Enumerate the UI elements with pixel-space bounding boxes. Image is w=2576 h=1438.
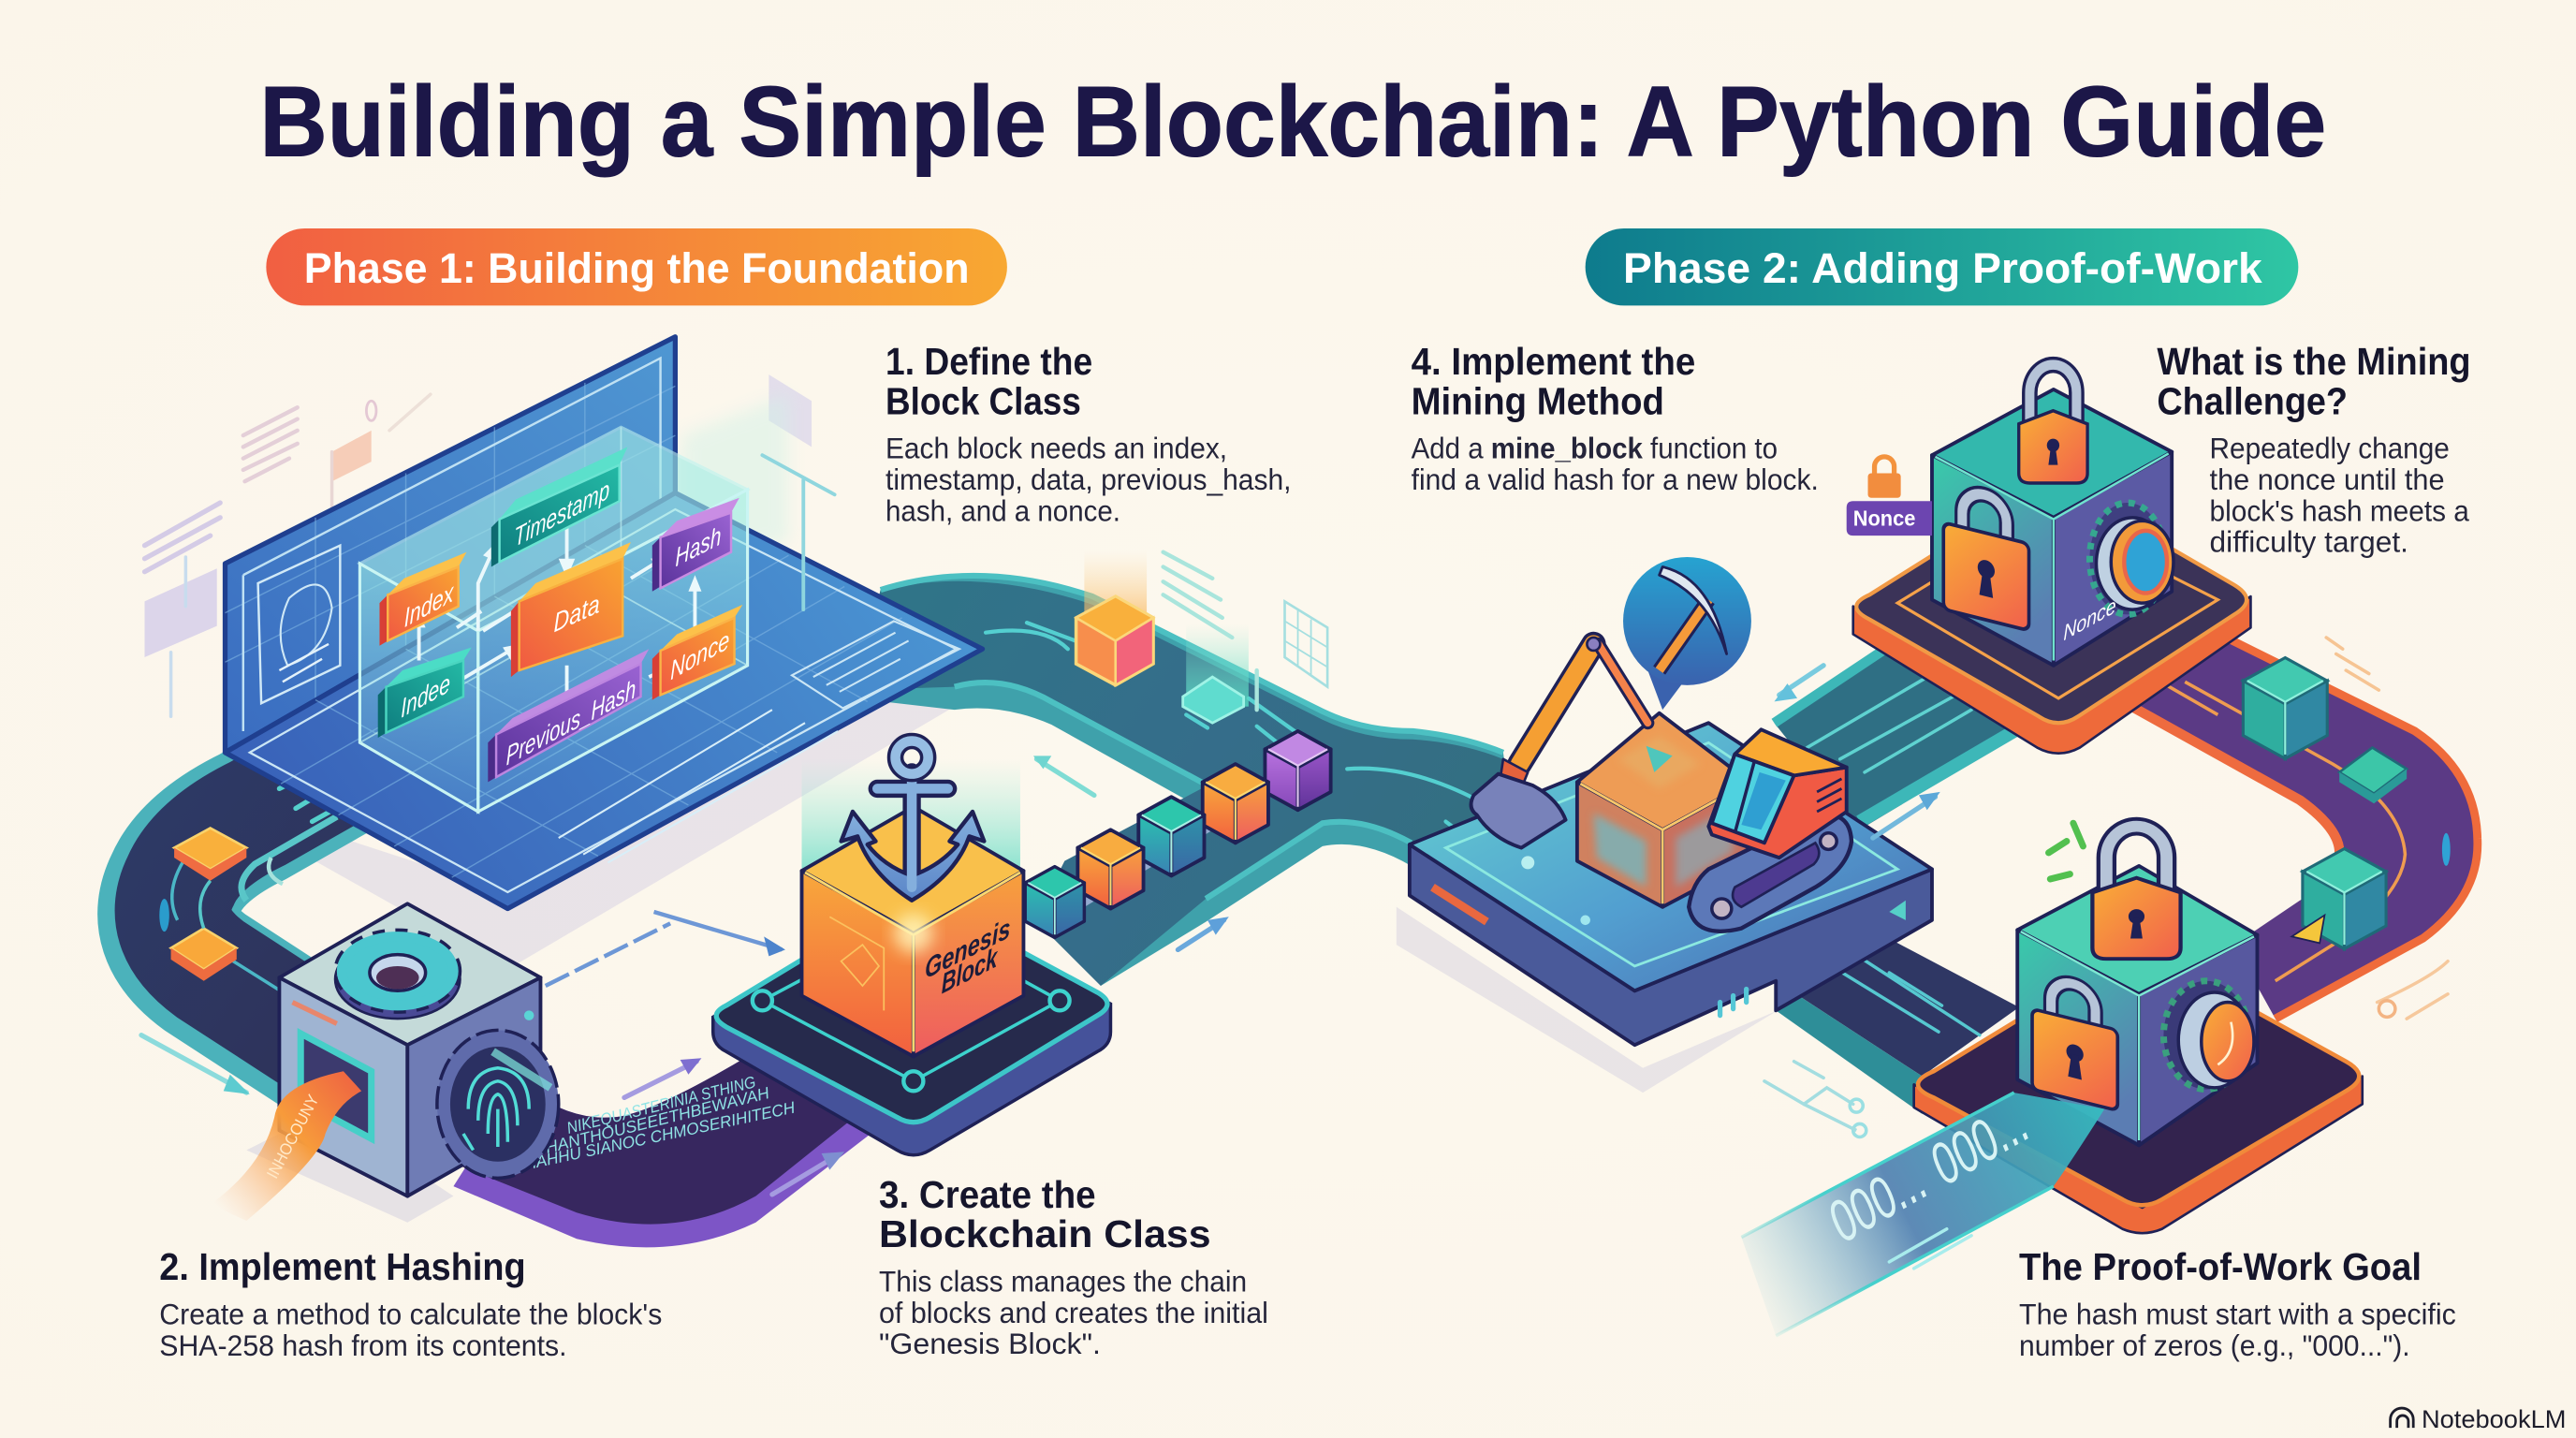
hash output ribbon with zeros: 000... [1817,1148,1938,1255]
proof-of-work goal text: number of zeros (e.g., "000..."). [2019,1328,2410,1362]
goal block [2017,827,2257,1145]
wall [225,337,675,753]
input window [300,1034,372,1138]
step 2 text: SHA-258 hash from its contents. [159,1328,567,1362]
hash output ribbon with zeros [1741,1090,2104,1336]
proof-of-work goal text [2019,1245,2456,1362]
field: Indee [378,647,472,738]
mining challenge text: block's hash meets a [2210,493,2469,527]
excavator platform [1397,723,1932,1093]
genesis label [925,911,1010,1000]
field: Index: Index [404,578,454,634]
padlock top [2019,365,2087,483]
floor [225,493,983,909]
field: Hash: Hash [675,521,722,573]
nonce text on block: Nonce [2063,594,2116,646]
road: nonce to lock (purple) [2111,636,2478,1019]
field: Nonce: Nonce [670,625,729,686]
field: Hash [652,498,739,592]
icon: success spark [2049,823,2083,879]
genesis label: Block [942,940,998,1000]
decorative floating panels around the blueprint [145,374,812,716]
step 4 text: find a valid hash for a new block. [1412,462,1819,496]
field: Nonce [652,605,742,700]
title: Building a Simple Blockchain: A Python Guide [259,66,2326,178]
input ribbon [211,1071,361,1221]
field: Indee: Indee [401,668,450,724]
hash string text on the road: HANTHOUSEEETHBEWAVAH [544,1083,771,1157]
block: purple [1265,731,1331,810]
block: orange 2 [1077,829,1144,909]
step 4 text [1412,340,1819,496]
step 2 text [159,1245,662,1362]
genesis beam [802,759,1020,890]
field: Previous_Hash [488,649,649,782]
step 1 text: Each block needs an index, [886,432,1227,465]
padlock top open [2092,827,2181,959]
step 3 text: of blocks and creates the initial [879,1296,1268,1329]
mining challenge text: Repeatedly change [2210,432,2450,465]
field: Previous_Hash: Previous_Hash [506,674,636,771]
padlock left [2032,974,2117,1110]
road: left loop [159,733,400,1077]
road: hash output (purple) [453,1043,877,1247]
mining challenge text: Challenge? [2157,379,2348,422]
decorative lines near teal cube [1164,552,1327,710]
step 4 text: 4. Implement the [1412,340,1695,383]
goal platform [1914,952,2363,1233]
connector arrows [413,513,701,720]
blueprint panel [225,337,983,909]
proof-of-work goal text: The Proof-of-Work Goal [2019,1245,2422,1288]
road: mining to nonce [1774,644,2037,829]
step 3 text: 3. Create the [879,1173,1096,1216]
step 3 text [879,1173,1268,1360]
mining challenge text: difficulty target. [2210,525,2408,559]
mining challenge text [2157,340,2471,559]
block: teal 2 [1025,867,1084,937]
hash string text on the road: HAHHU SIANOC CHMOSERIHITECH [522,1098,797,1173]
step 2 text: Create a method to calculate the block's [159,1298,662,1331]
phase 2 pill: Phase 2: Adding Proof-of-Work [1623,244,2262,292]
phase 2 pill [1586,228,2298,305]
step 3 text: This class manages the chain [879,1264,1247,1298]
chain of blocks [1025,731,1331,937]
step 4 text: Mining Method [1412,379,1664,422]
hash output ribbon with zeros: 000... [1919,1090,2040,1197]
mining challenge text: What is the Mining [2157,340,2471,383]
step 3 text: "Genesis Block". [879,1327,1101,1360]
phase 1 pill [266,228,1007,305]
glowing cube on road: orange [1076,550,1153,685]
stone block being mined [1577,713,1749,907]
step 2 text: 2. Implement Hashing [159,1245,526,1288]
step 4 text: Add a mine_block function to [1412,432,1778,465]
step 1 text: Block Class [886,379,1081,422]
field: Timestamp: Timestamp [514,475,609,553]
notebooklm watermark: NotebookLM [2422,1404,2566,1433]
nonce platform [1853,485,2250,754]
boom arm [1519,644,1593,764]
padlock left [1943,485,2029,631]
bucket [1471,774,1566,848]
icon: gear [335,936,460,1019]
mining challenge text: the nonce until the [2210,462,2445,496]
genesis label: Genesis [925,911,1010,986]
field: Timestamp [491,447,627,566]
block: orange [1203,764,1268,843]
fingerprint reader [437,1030,559,1178]
step 1 text: timestamp, data, previous_hash, [886,462,1292,496]
step 1 text [886,340,1292,527]
excavator [1471,638,1852,932]
tracks [1689,814,1852,932]
small floating accents right side [1764,666,2448,1137]
hashing machine: INHOCOUNY [263,1092,323,1181]
glowing cube on road: teal [1183,624,1249,723]
connector arrows left side [141,756,1229,1195]
phase 1 pill: Phase 1: Building the Foundation [304,244,970,292]
cubes on purple road [2243,638,2407,948]
nonce tag with lock: Nonce [1853,506,1915,531]
proof-of-work goal text: The hash must start with a specific [2019,1298,2456,1331]
combination dial [2089,503,2174,614]
glass block structure [359,427,748,812]
field: Data: Data [554,589,600,638]
step 1 text: 1. Define the [886,340,1092,383]
nonce tag with lock [1847,457,1932,536]
icon: pick in speech bubble [1623,557,1751,710]
cab [1708,755,1847,858]
step 1 text: hash, and a nonce. [886,493,1120,527]
hash string text on the road: NIKEQUASTERINIA STHING [564,1072,757,1137]
nonce block [1932,365,2174,666]
combination dial orange [2163,981,2254,1090]
blueprint shadow [181,649,983,969]
genesis block [802,807,1023,1056]
icon: anchor [842,741,984,901]
field: Index [379,552,466,646]
step 3 text: Blockchain Class [879,1212,1211,1255]
field: Data [511,542,631,677]
road: mining to goal [1776,930,2019,1114]
hashing machine [211,903,559,1223]
block: teal [1138,797,1204,875]
genesis platform [713,895,1110,1155]
road: central connector [855,576,1519,986]
left loop cubes [171,829,246,981]
